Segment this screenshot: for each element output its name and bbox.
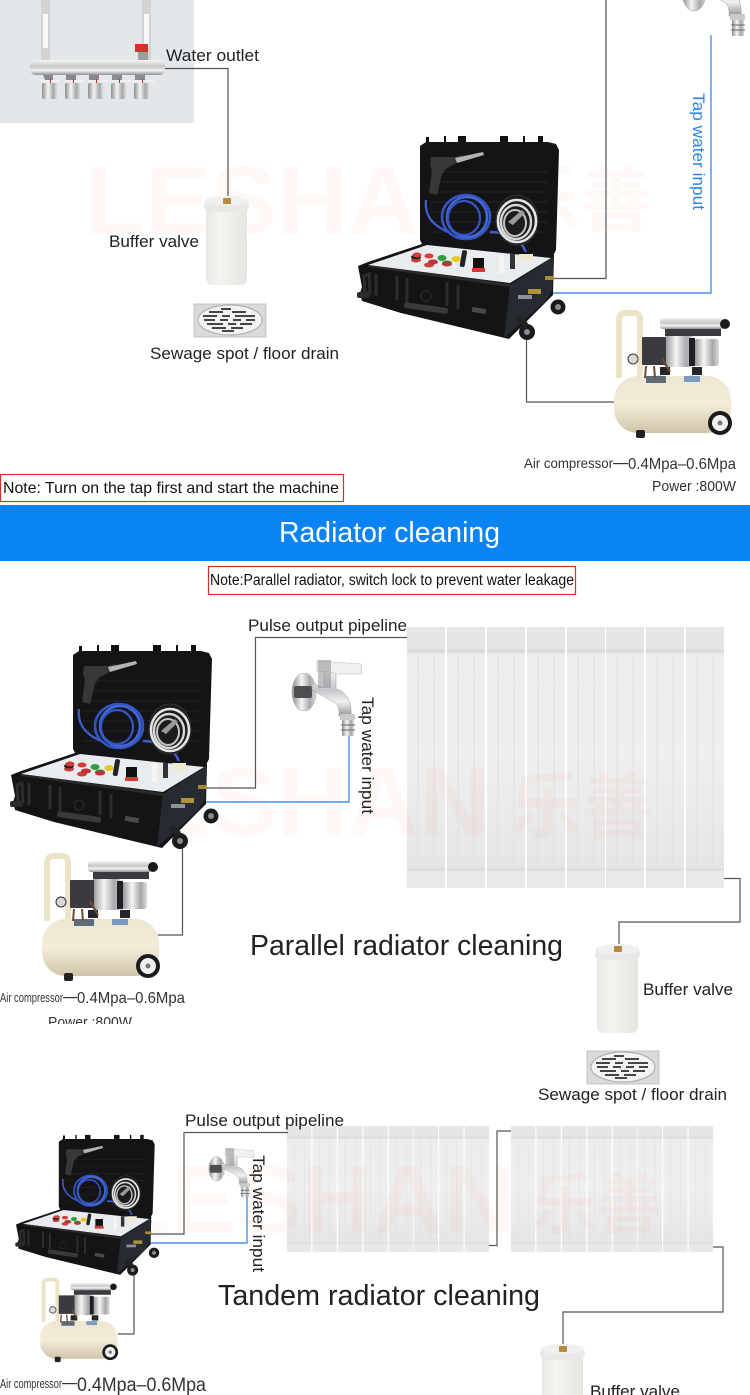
pipe: pulse output tandem bbox=[150, 1132, 288, 1234]
pipe: pulse output to top bbox=[553, 0, 606, 278]
compressor: top bbox=[614, 313, 732, 438]
pipe: tap water input bbox=[545, 35, 711, 293]
radiator: tandem left bbox=[287, 1126, 489, 1252]
label: tap water input blue: Tap water input bbox=[689, 93, 708, 210]
watermark: middle: 乐善 bbox=[510, 768, 654, 848]
machine: top bbox=[357, 136, 566, 340]
radiator: tandem right bbox=[511, 1126, 713, 1252]
pipe: radiator to buffer valve bbox=[619, 878, 740, 946]
icon: tap tandem bbox=[209, 1148, 254, 1197]
label: air compressor spec: Air compressor bbox=[524, 456, 613, 471]
heading: parallel radiator cleaning: Parallel radiator cleaning bbox=[250, 930, 563, 962]
icon: buffer valve tandem bbox=[540, 1344, 585, 1395]
machine: tandem bbox=[15, 1135, 159, 1276]
radiator: parallel bbox=[407, 627, 724, 888]
pipe: compressor parallel bbox=[158, 848, 182, 935]
label: buffer valve: Buffer valve bbox=[109, 232, 199, 251]
label: air compressor spec bbox=[524, 456, 737, 495]
label: buffer valve parallel: Buffer valve bbox=[643, 980, 733, 999]
compressor: parallel bbox=[42, 856, 160, 981]
watermark: bottom: 乐善 bbox=[530, 1168, 662, 1242]
pipe: tap input parallel bbox=[190, 736, 349, 802]
note: parallel radiator: Note:Parallel radiator, switch lock to prevent water leakage bbox=[210, 572, 574, 589]
pipe: water outlet to buffer valve bbox=[165, 68, 228, 198]
label: sewage spot parallel: Sewage spot / floor drain bbox=[538, 1085, 727, 1104]
watermark: middle: LESHAN bbox=[85, 747, 490, 856]
label: pulse output pipeline tandem: Pulse output pipeline bbox=[185, 1111, 344, 1130]
icon: floor drain top bbox=[194, 304, 266, 337]
label: air compressor spec tandem: Air compressor bbox=[0, 1376, 62, 1391]
section banner: radiator cleaning bbox=[0, 505, 750, 561]
label: air compressor spec: 0.4Mpa–0.6Mpa bbox=[628, 456, 736, 473]
label: tap water input parallel: Tap water input bbox=[358, 697, 377, 814]
pipe: tap input tandem bbox=[148, 1197, 247, 1243]
compressor: tandem bbox=[40, 1280, 118, 1362]
label: air compressor spec: Power :800W bbox=[652, 478, 737, 495]
label: air compressor spec parallel bbox=[0, 990, 185, 1031]
machine: parallel bbox=[10, 645, 218, 849]
note: parallel radiator bbox=[208, 566, 576, 594]
icon: buffer valve top bbox=[204, 196, 249, 285]
icon: tap top bbox=[682, 0, 750, 36]
label: air compressor spec parallel: Power :800W bbox=[48, 1014, 133, 1031]
label: sewage spot: Sewage spot / floor drain bbox=[150, 344, 339, 363]
section banner: radiator cleaning: Radiator cleaning bbox=[279, 517, 500, 549]
label: air compressor spec tandem bbox=[0, 1375, 206, 1395]
label: tap water input tandem: Tap water input bbox=[249, 1155, 268, 1272]
watermark: bottom: LESHAN bbox=[110, 1145, 515, 1254]
icon: buffer valve parallel bbox=[595, 944, 640, 1033]
label: air compressor spec parallel: Air compressor bbox=[0, 990, 63, 1005]
icon: tap parallel bbox=[292, 660, 362, 736]
label: water outlet: Water outlet bbox=[166, 46, 259, 65]
watermark: top: LESHAN bbox=[85, 146, 490, 255]
note: turn on tap bbox=[0, 474, 344, 502]
icon: floor drain parallel bbox=[587, 1051, 659, 1084]
label: air compressor spec parallel: 0.4Mpa–0.6Mpa bbox=[77, 990, 185, 1007]
heading: tandem radiator cleaning: Tandem radiator cleaning bbox=[218, 1280, 540, 1312]
pipe: radiator to buffer valve tandem bbox=[563, 1247, 723, 1346]
pipe: radiator link bbox=[489, 1131, 511, 1246]
note: turn on tap: Note: Turn on the tap first and start the machine bbox=[3, 480, 339, 497]
label: pulse output pipeline parallel: Pulse output pipeline bbox=[248, 616, 407, 635]
watermark: top: 乐善 bbox=[508, 162, 652, 242]
pipe: compressor tandem bbox=[118, 1275, 134, 1334]
pipe: air compressor bbox=[526, 338, 617, 402]
manifold panel: water outlet source bbox=[0, 0, 194, 123]
pipe: pulse output parallel bbox=[206, 638, 407, 788]
